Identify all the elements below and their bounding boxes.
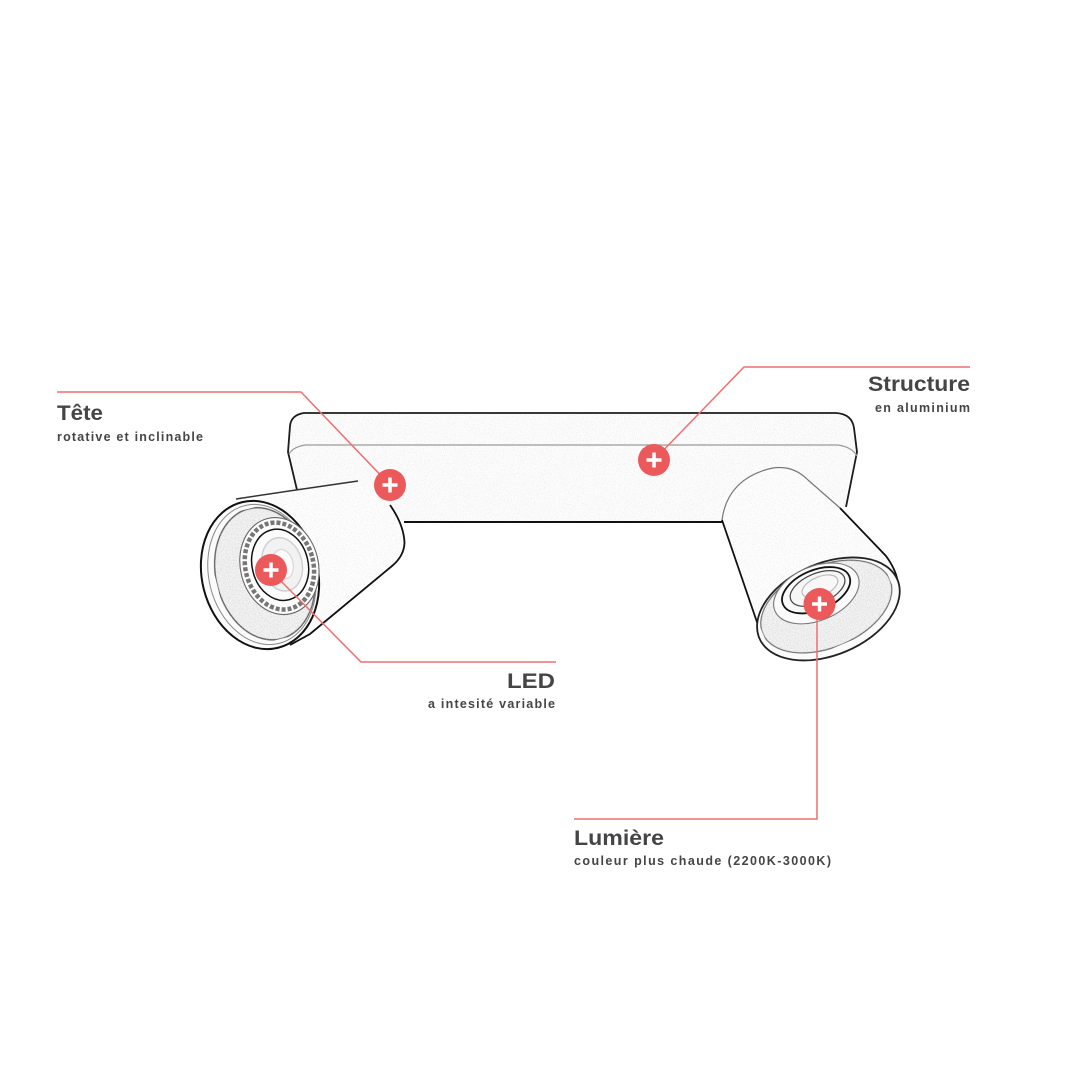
label: LED bbox=[428, 670, 555, 711]
marker: Structure bbox=[638, 444, 670, 476]
label: Lumière bbox=[574, 827, 831, 868]
line: LED bbox=[270, 570, 556, 662]
leader lines bbox=[57, 367, 970, 819]
line: Structure bbox=[654, 367, 970, 460]
mounting bar bbox=[288, 413, 857, 522]
illustration: ceiling spotlight bbox=[186, 413, 915, 681]
label: Structure: Structure bbox=[868, 373, 970, 396]
label: Lumière: Lumière bbox=[574, 827, 664, 850]
label: Tête: rotative et inclinable bbox=[57, 430, 203, 444]
label: Structure bbox=[868, 373, 970, 415]
label: Tête bbox=[57, 402, 203, 444]
marker: Tête bbox=[374, 469, 406, 501]
label: Structure: en aluminium bbox=[875, 401, 970, 415]
right lamp face bbox=[741, 537, 915, 681]
marker: Lumière bbox=[804, 588, 836, 620]
label: Lumière: couleur plus chaude (2200K-3000K) bbox=[574, 854, 831, 868]
label: Tête: Tête bbox=[57, 402, 103, 425]
left lamp head bbox=[186, 481, 404, 662]
line: Tête bbox=[57, 392, 390, 485]
right lamp head bbox=[722, 468, 915, 681]
marker: LED bbox=[255, 554, 287, 586]
line: Lumière bbox=[574, 604, 817, 819]
label: LED: a intesité variable bbox=[428, 697, 555, 711]
label: LED: LED bbox=[507, 670, 555, 693]
left lamp face bbox=[186, 488, 336, 662]
